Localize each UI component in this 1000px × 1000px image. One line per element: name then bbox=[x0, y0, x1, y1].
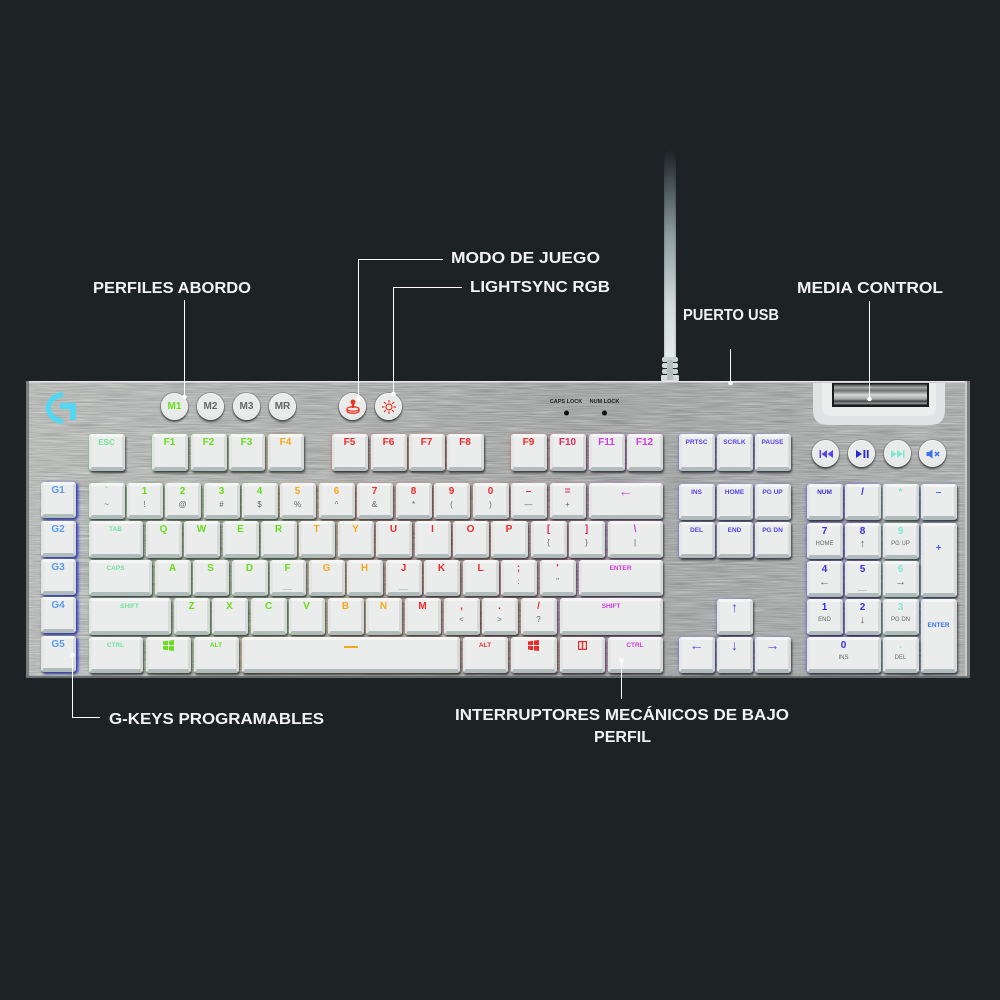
numeric keypad: DEL bbox=[895, 655, 906, 661]
function key row: F7 bbox=[421, 437, 432, 448]
callout: modo de juego bbox=[356, 250, 600, 401]
home key row: ' bbox=[556, 563, 559, 574]
callout: lightsync rgb bbox=[391, 279, 610, 396]
home key row: ; bbox=[517, 563, 520, 574]
arrow keys: → bbox=[766, 637, 780, 653]
QWERTY key row: } bbox=[585, 538, 588, 547]
number key row: 8 bbox=[411, 486, 416, 497]
number key row: – bbox=[526, 486, 531, 497]
arrow keys: ↑ bbox=[731, 599, 738, 615]
G-key column: G1 bbox=[51, 485, 65, 496]
home key row: G bbox=[323, 563, 330, 574]
callout: puerto usb: PUERTO USB bbox=[683, 307, 779, 324]
number key row: 6 bbox=[334, 486, 339, 497]
shift key row bbox=[87, 596, 666, 638]
lock indicators: CAPS LOCK bbox=[550, 399, 582, 405]
numeric keypad: 8 bbox=[860, 526, 865, 537]
numeric keypad: PG DN bbox=[891, 617, 910, 623]
QWERTY key row: Y bbox=[352, 524, 359, 535]
number key row: # bbox=[219, 500, 224, 509]
arrow keys: ↓ bbox=[731, 637, 738, 653]
QWERTY key row: E bbox=[237, 524, 244, 535]
navigation cluster: insert and delete block: END bbox=[728, 527, 741, 534]
callout: g-keys programables: G-KEYS PROGRAMABLES bbox=[109, 711, 324, 728]
number key row: ← bbox=[618, 483, 632, 499]
shift key row: C bbox=[265, 601, 272, 612]
QWERTY key row: T bbox=[313, 524, 320, 535]
profile buttons: MR bbox=[275, 401, 290, 412]
navigation cluster: print screen row: PRTSC bbox=[685, 439, 708, 446]
QWERTY key row: W bbox=[197, 524, 206, 535]
numeric keypad: → bbox=[895, 576, 906, 588]
G-key column: G3 bbox=[51, 562, 65, 573]
QWERTY key row: { bbox=[547, 538, 550, 547]
function key row: F8 bbox=[459, 437, 471, 448]
game mode button bbox=[339, 393, 366, 420]
navigation cluster: print screen row bbox=[676, 432, 794, 474]
function key row: F10 bbox=[559, 437, 576, 448]
numeric keypad: * bbox=[899, 487, 902, 498]
numeric keypad: ↓ bbox=[860, 614, 865, 626]
number key row: ` bbox=[105, 486, 108, 497]
home key row: D bbox=[246, 563, 253, 574]
G-key column bbox=[40, 480, 80, 676]
navigation cluster: insert and delete block: PG DN bbox=[762, 527, 783, 534]
profile buttons: M1 bbox=[168, 401, 181, 412]
number key row: ( bbox=[450, 500, 453, 509]
numeric keypad: ← bbox=[819, 576, 830, 588]
bottom modifier row with space bar bbox=[87, 636, 666, 676]
shift key row: SHIFT bbox=[120, 603, 139, 610]
callout: modo de juego: MODO DE JUEGO bbox=[451, 250, 600, 267]
function key row: F5 bbox=[344, 437, 355, 448]
G-key column: G2 bbox=[51, 524, 65, 535]
numeric keypad: INS bbox=[838, 655, 848, 661]
lock indicators bbox=[550, 399, 619, 416]
callout: interruptores mecánicos de bajo perfil: INTERRUPTORES MECÁNICOS DE BAJO bbox=[455, 705, 789, 724]
QWERTY key row: Q bbox=[160, 524, 167, 535]
navigation cluster: insert and delete block: HOME bbox=[725, 489, 744, 496]
USB cable bbox=[661, 150, 679, 381]
number key row: 9 bbox=[449, 486, 454, 497]
G-key column: G4 bbox=[51, 600, 65, 611]
QWERTY key row: [ bbox=[547, 524, 550, 535]
arrow keys bbox=[676, 598, 794, 676]
navigation cluster: insert and delete block: PG UP bbox=[762, 489, 783, 496]
numeric keypad: END bbox=[818, 617, 831, 623]
numeric keypad: + bbox=[936, 543, 941, 554]
callout: puerto usb bbox=[683, 307, 779, 385]
QWERTY key row: | bbox=[634, 538, 636, 547]
keyboard body bbox=[26, 381, 970, 678]
number key row: 2 bbox=[180, 486, 185, 497]
numeric keypad: HOME bbox=[816, 541, 834, 547]
shift key row: N bbox=[380, 601, 387, 612]
home key row: ENTER bbox=[609, 565, 632, 572]
arrow keys: ← bbox=[690, 637, 704, 653]
bottom modifier row with space bar: ALT bbox=[210, 642, 222, 649]
number key row: % bbox=[294, 500, 301, 509]
home key row: S bbox=[207, 563, 214, 574]
shift key row: Z bbox=[188, 601, 195, 612]
numeric keypad: 3 bbox=[898, 602, 903, 613]
home key row: A bbox=[169, 563, 176, 574]
G-key column: G5 bbox=[51, 639, 65, 650]
home key row: " bbox=[556, 577, 559, 586]
numeric keypad: PG UP bbox=[891, 541, 910, 547]
shift key row: X bbox=[226, 601, 233, 612]
function key row: F1 bbox=[164, 437, 175, 448]
QWERTY key row: ] bbox=[585, 524, 588, 535]
shift key row: > bbox=[497, 615, 502, 624]
numeric keypad: ↑ bbox=[860, 538, 865, 550]
home key row: J bbox=[401, 563, 406, 574]
media control buttons bbox=[810, 439, 948, 470]
number key row: ) bbox=[489, 500, 492, 509]
navigation cluster: insert and delete block: DEL bbox=[690, 527, 703, 534]
navigation cluster: print screen row: SCRLK bbox=[723, 439, 746, 446]
callout: interruptores mecánicos de bajo perfil bbox=[455, 658, 789, 746]
function key row bbox=[87, 433, 666, 474]
home key row: K bbox=[438, 563, 445, 574]
QWERTY key row: O bbox=[467, 524, 474, 535]
number key row: = bbox=[565, 486, 570, 497]
shift key row: V bbox=[303, 601, 310, 612]
callout: interruptores mecánicos de bajo perfil: PERFIL bbox=[594, 729, 651, 746]
navigation cluster: insert and delete block: INS bbox=[691, 489, 702, 496]
lock indicators: NUM LOCK bbox=[590, 399, 619, 405]
number key row: ~ bbox=[104, 500, 109, 509]
numeric keypad: 2 bbox=[860, 602, 865, 613]
numeric keypad: / bbox=[861, 487, 864, 498]
home key row: CAPS bbox=[106, 565, 125, 572]
bottom modifier row with space bar: CTRL bbox=[107, 642, 124, 649]
number key row: @ bbox=[178, 500, 187, 509]
numeric keypad: ENTER bbox=[927, 622, 950, 629]
numeric keypad: – bbox=[936, 487, 941, 498]
number key row: 0 bbox=[488, 486, 493, 497]
function key row: F9 bbox=[523, 437, 534, 448]
number key row: 1 bbox=[142, 486, 147, 497]
callout: g-keys programables bbox=[70, 653, 324, 728]
numeric keypad: 0 bbox=[841, 640, 846, 651]
number key row: — bbox=[524, 500, 532, 509]
number key row: ^ bbox=[335, 500, 338, 509]
number key row: 5 bbox=[295, 486, 300, 497]
QWERTY key row: R bbox=[275, 524, 282, 535]
callout: media control bbox=[797, 280, 943, 401]
QWERTY key row: I bbox=[431, 524, 434, 535]
home key row: F bbox=[284, 563, 291, 574]
numeric keypad: NUM bbox=[817, 489, 832, 496]
home key row: L bbox=[477, 563, 484, 574]
function key row: F6 bbox=[383, 437, 394, 448]
callout: lightsync rgb: LIGHTSYNC RGB bbox=[470, 279, 610, 296]
numeric keypad: . bbox=[899, 640, 902, 651]
number key row: 7 bbox=[372, 486, 377, 497]
number key row bbox=[87, 482, 666, 522]
media roller housing bbox=[813, 383, 945, 425]
numeric keypad: 9 bbox=[898, 526, 903, 537]
home key row: : bbox=[517, 577, 520, 586]
bottom modifier row with space bar: CTRL bbox=[626, 642, 644, 649]
shift key row: , bbox=[460, 601, 463, 612]
G logo bbox=[46, 392, 76, 424]
navigation cluster: insert and delete block bbox=[676, 482, 794, 562]
shift key row: ? bbox=[536, 615, 541, 624]
QWERTY key row bbox=[87, 520, 666, 562]
number key row: 4 bbox=[257, 486, 262, 497]
QWERTY key row: P bbox=[506, 524, 512, 535]
profile buttons: M3 bbox=[240, 401, 253, 412]
function key row: F2 bbox=[203, 437, 214, 448]
bottom modifier row with space bar: ALT bbox=[479, 642, 491, 649]
number key row: * bbox=[412, 500, 415, 509]
shift key row: < bbox=[459, 615, 464, 624]
numeric keypad bbox=[804, 482, 960, 676]
function key row: F12 bbox=[636, 437, 653, 448]
shift key row: / bbox=[537, 601, 540, 612]
number key row: $ bbox=[257, 500, 262, 509]
function key row: ESC bbox=[98, 438, 115, 447]
function key row: F4 bbox=[280, 437, 291, 448]
callout: perfiles abordo: PERFILES ABORDO bbox=[93, 280, 251, 297]
QWERTY key row: TAB bbox=[109, 526, 122, 533]
numeric keypad: 1 bbox=[822, 602, 827, 613]
profile buttons: M2 bbox=[204, 401, 217, 412]
profile buttons bbox=[160, 392, 298, 424]
shift key row: SHIFT bbox=[602, 603, 620, 610]
function key row: F3 bbox=[241, 437, 252, 448]
home key row: H bbox=[361, 563, 368, 574]
numeric keypad: 7 bbox=[822, 526, 827, 537]
shift key row: B bbox=[342, 601, 349, 612]
numeric keypad: 5 bbox=[860, 564, 865, 575]
QWERTY key row: \ bbox=[634, 524, 636, 535]
numeric keypad: 4 bbox=[822, 564, 827, 575]
lighting button bbox=[375, 393, 402, 420]
number key row: 3 bbox=[219, 486, 224, 497]
home key row bbox=[87, 558, 666, 600]
numeric keypad: 6 bbox=[898, 564, 903, 575]
callout: media control: MEDIA CONTROL bbox=[797, 280, 943, 297]
shift key row: M bbox=[418, 601, 427, 612]
number key row: + bbox=[565, 500, 570, 509]
shift key row: . bbox=[498, 601, 501, 612]
QWERTY key row: U bbox=[390, 524, 397, 535]
number key row: ! bbox=[143, 500, 146, 509]
number key row: & bbox=[372, 500, 377, 509]
navigation cluster: print screen row: PAUSE bbox=[762, 439, 783, 446]
function key row: F11 bbox=[598, 437, 615, 448]
callout: perfiles abordo bbox=[93, 280, 251, 399]
